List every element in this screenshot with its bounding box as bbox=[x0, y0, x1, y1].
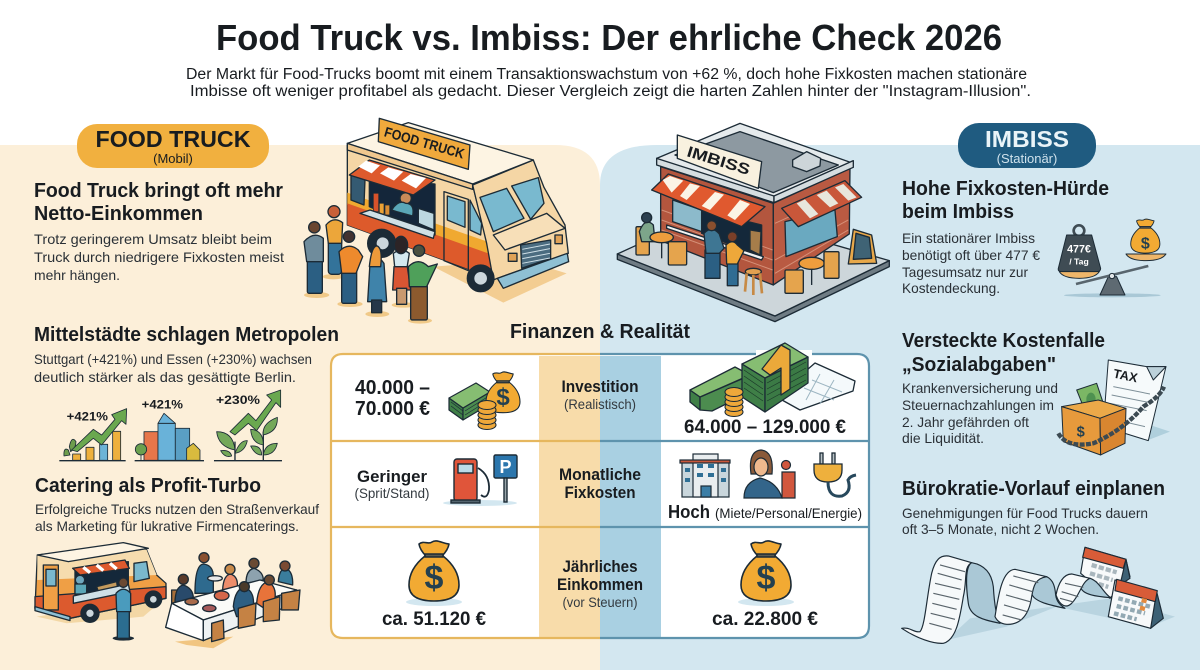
text: hidden costs: Steuernachzahlungen im bbox=[902, 397, 1054, 413]
row label: investment: Investition bbox=[562, 377, 638, 396]
heading: mid-size cities: Mittelstädte schlagen Metropolen bbox=[34, 324, 339, 346]
icon: money bag right bbox=[738, 541, 794, 606]
row label: annual income bbox=[557, 557, 643, 610]
heading: hidden costs: Versteckte Kostenfalle bbox=[902, 330, 1105, 352]
text: hidden costs: 2. Jahr gefährden oft bbox=[902, 414, 1029, 430]
text: bureaucracy bbox=[902, 505, 1148, 537]
intro text bbox=[186, 66, 1031, 100]
row: fixed costs right value: Hoch bbox=[668, 502, 710, 522]
heading: high fixed costs: beim Imbiss bbox=[902, 201, 1014, 223]
text: hidden costs: die Liquidität. bbox=[902, 430, 984, 446]
person 5 bbox=[393, 236, 411, 304]
icon: large cash stacks and plan bbox=[690, 343, 855, 416]
icon: bars with arrow bbox=[59, 409, 127, 461]
comparison table bbox=[331, 343, 869, 638]
text: mid-size cities bbox=[34, 351, 312, 385]
row: annual income right: ca. 22.800 € bbox=[712, 609, 818, 630]
text: high fixed costs: benötigt oft über 477 € bbox=[902, 247, 1040, 263]
person 6 bbox=[408, 245, 437, 320]
icon: fuel pump and parking sign bbox=[443, 455, 517, 506]
icon: building bbox=[680, 454, 730, 497]
icon: paper scroll and calendars bbox=[902, 547, 1175, 643]
person 4 bbox=[368, 246, 387, 313]
illustration: catering truck and dinner table bbox=[35, 543, 300, 648]
person 3 bbox=[339, 231, 363, 303]
row label: annual income: (vor Steuern) bbox=[562, 594, 638, 610]
icon: power plug bbox=[814, 453, 856, 496]
row: fixed costs right value bbox=[668, 502, 862, 522]
icon: cash, bag and coins small: $ bbox=[496, 384, 510, 411]
icon: city skyline bbox=[135, 398, 204, 461]
badge: imbiss bbox=[958, 123, 1096, 168]
illustration: food truck with customers bbox=[304, 118, 569, 324]
text: food truck income: Truck durch niedrigere Fixkosten meist bbox=[34, 249, 284, 265]
row: fixed costs left value: (Sprit/Stand) bbox=[354, 485, 430, 501]
badge: food truck: (Mobil) bbox=[153, 151, 193, 166]
badge: imbiss: (Stationär) bbox=[997, 151, 1057, 166]
text: hidden costs bbox=[902, 380, 1058, 446]
text: mid-size cities: deutlich stärker als das gesättigte Berlin. bbox=[34, 369, 296, 385]
heading: hidden costs bbox=[902, 330, 1105, 376]
text: catering bbox=[35, 501, 319, 534]
icon: calendar back bbox=[1081, 547, 1130, 598]
person 2 bbox=[326, 206, 343, 274]
text: food truck income: Trotz geringerem Umsatz bleibt beim bbox=[34, 231, 272, 247]
icon: calendar front bbox=[1108, 579, 1163, 628]
row label: annual income: Jährliches bbox=[562, 557, 638, 576]
heading: high fixed costs bbox=[902, 178, 1109, 223]
icon: balance scale: 477€ bbox=[1067, 243, 1091, 255]
heading: hidden costs: „Sozialabgaben" bbox=[902, 354, 1056, 376]
text: high fixed costs: Ein stationärer Imbiss bbox=[902, 230, 1035, 246]
icon: tax box with chain: $ bbox=[1077, 425, 1085, 441]
title: Food Truck vs. Imbiss: Der ehrliche Check 2026 bbox=[216, 17, 1002, 58]
text: catering: als Marketing für lukrative Firmencaterings. bbox=[35, 518, 299, 534]
row: investment left value: 70.000 € bbox=[355, 398, 430, 420]
row label: annual income: Einkommen bbox=[557, 575, 643, 594]
icon: fuel pump and parking sign: P bbox=[499, 457, 512, 477]
icon: money bag left: $ bbox=[425, 559, 444, 597]
row: fixed costs left value bbox=[354, 467, 430, 501]
text: high fixed costs bbox=[902, 230, 1040, 296]
row: investment right value: 64.000 – 129.000 € bbox=[684, 417, 846, 438]
badge: imbiss: IMBISS bbox=[985, 126, 1069, 152]
text: catering: Erfolgreiche Trucks nutzen den Straßenverkauf bbox=[35, 501, 319, 517]
icon: balance scale: $ bbox=[1141, 235, 1150, 252]
icon: tax box with chain: TAX bbox=[1112, 367, 1139, 385]
row: annual income left: ca. 51.120 € bbox=[382, 609, 486, 630]
text: bureaucracy: oft 3–5 Monate, nicht 2 Wochen. bbox=[902, 521, 1099, 537]
illustration: food truck with customers: FOOD TRUCK bbox=[382, 124, 466, 162]
row label: investment bbox=[562, 377, 638, 412]
text: high fixed costs: Tagesumsatz nur zur bbox=[902, 264, 1028, 280]
icon: growing plants bbox=[214, 390, 282, 461]
chart icons: growth figures bbox=[59, 390, 282, 461]
badge: food truck: FOOD TRUCK bbox=[96, 126, 251, 152]
icon: staff bbox=[744, 450, 795, 498]
heading: bureaucracy: Bürokratie-Vorlauf einplanen bbox=[902, 478, 1165, 500]
heading: finance section: Finanzen & Realität bbox=[510, 321, 690, 343]
text: food truck income: mehr hängen. bbox=[34, 267, 120, 283]
row label: investment: (Realistisch) bbox=[564, 396, 636, 412]
row label: monthly fixed costs: Monatliche bbox=[559, 465, 641, 484]
heading: food truck income: Netto-Einkommen bbox=[34, 203, 203, 225]
heading: food truck income: Food Truck bringt oft mehr bbox=[34, 180, 283, 202]
icon: cash, bag and coins small bbox=[449, 372, 520, 430]
text: mid-size cities: Stuttgart (+421%) und Essen (+230%) wachsen bbox=[34, 351, 312, 367]
row: investment left value bbox=[355, 377, 430, 420]
panel background: imbiss side bbox=[600, 145, 1200, 670]
row: investment left value: 40.000 – bbox=[355, 377, 430, 399]
icon: city skyline: +421% bbox=[142, 398, 183, 412]
text: hidden costs: Krankenversicherung und bbox=[902, 380, 1058, 396]
icon: tax box with chain bbox=[1058, 360, 1170, 455]
row: fixed costs left value: Geringer bbox=[357, 467, 427, 486]
icon: money bag right: $ bbox=[757, 559, 776, 597]
heading: food truck income bbox=[34, 180, 283, 225]
icon: growing plants: +230% bbox=[216, 393, 260, 407]
intro text: Imbisse oft weniger profitabel als gedacht. Dieser Vergleich zeigt die harten Zahlen hinter der "Instagram-Illusion". bbox=[190, 83, 1031, 100]
heading: high fixed costs: Hohe Fixkosten-Hürde bbox=[902, 178, 1109, 200]
dinner table with guests bbox=[166, 553, 300, 648]
panel background: food truck side bbox=[0, 145, 600, 670]
icon: balance scale bbox=[1058, 219, 1166, 297]
text: bureaucracy: Genehmigungen für Food Trucks dauern bbox=[902, 505, 1148, 521]
icon: money bag left bbox=[406, 541, 462, 606]
person 1 bbox=[304, 222, 323, 293]
icon: balance scale: / Tag bbox=[1069, 256, 1089, 266]
badge: food truck bbox=[77, 124, 269, 168]
icon: bars with arrow: +421% bbox=[67, 410, 108, 424]
heading: catering: Catering als Profit-Turbo bbox=[35, 475, 261, 497]
row: fixed costs right value: (Miete/Personal/Energie) bbox=[715, 505, 862, 521]
illustration: imbiss building bbox=[617, 123, 889, 322]
illustration: imbiss building: IMBISS bbox=[685, 144, 752, 179]
text: food truck income bbox=[34, 231, 284, 283]
text: high fixed costs: Kostendeckung. bbox=[902, 280, 1000, 296]
catering truck bbox=[35, 543, 166, 641]
row label: monthly fixed costs bbox=[559, 465, 641, 502]
intro text: Der Markt für Food-Trucks boomt mit einem Transaktionswachstum von +62 %, doch hohe Fixkosten machen stationäre bbox=[186, 66, 1027, 83]
row label: monthly fixed costs: Fixkosten bbox=[564, 483, 636, 502]
